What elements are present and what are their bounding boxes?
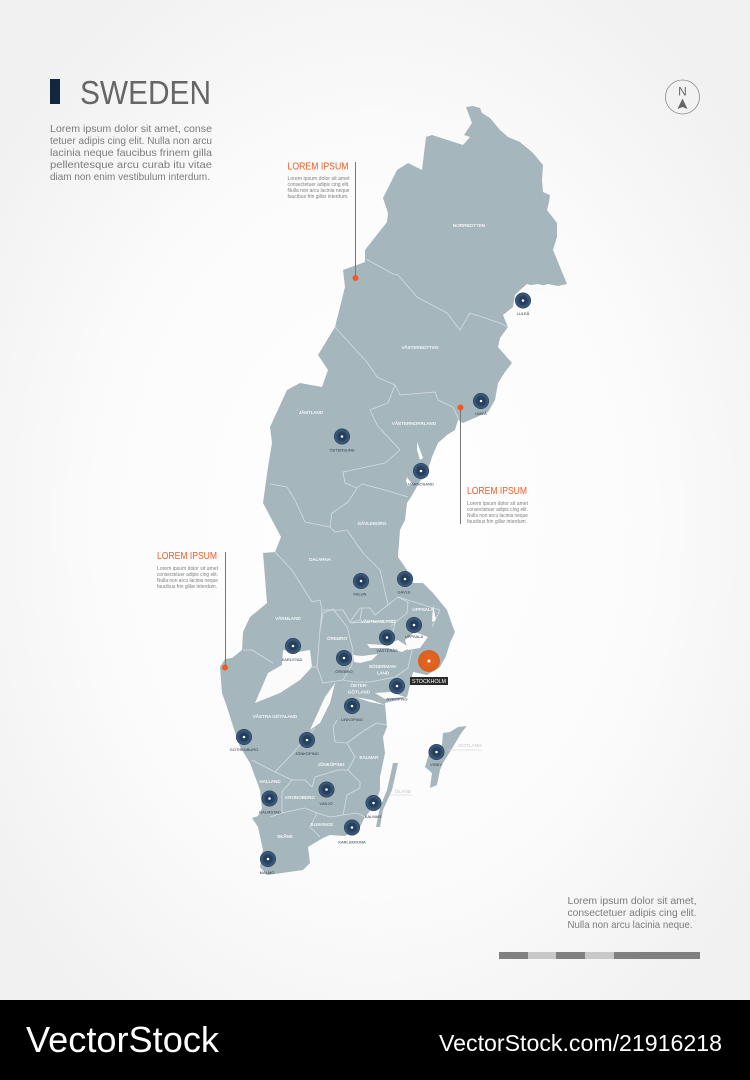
coastal specks	[525, 284, 566, 296]
mainland outline	[220, 106, 567, 875]
city pins	[230, 292, 531, 875]
intro paragraph	[50, 124, 212, 183]
capital pin: Stockholm	[410, 650, 448, 685]
region labels: VÄSTRA GÖTALAND	[253, 713, 298, 719]
island label: Oland: ÖLAND	[395, 788, 412, 795]
region labels: SÖDERMAN-	[369, 663, 398, 669]
region labels: VÄSTERNORRLAND	[392, 420, 437, 426]
city pins: VÄXJÖ	[319, 801, 333, 806]
region labels: ÖREBRO	[327, 635, 347, 641]
icon: north compass: N	[678, 84, 687, 98]
island label: Gotland	[449, 743, 482, 750]
region labels	[253, 223, 485, 839]
segmented bar	[499, 952, 700, 959]
callout: east: Nulla non arcu lacinia neque	[467, 513, 528, 519]
callout: west: LOREM IPSUM	[157, 551, 217, 562]
footer band: VectorStock.com/21916218	[439, 1030, 722, 1056]
callout: east: consectetuer adipis cing elit.	[467, 507, 528, 513]
region labels: HALLAND	[259, 779, 281, 784]
region labels: JÖNKÖPING	[317, 761, 345, 767]
callout: west: Lorem ipsum dolor sit amet	[157, 566, 219, 572]
callout: north: Lorem ipsum dolor sit amet	[288, 176, 350, 182]
callout: north: LOREM IPSUM	[288, 162, 348, 172]
city pins: NYKÖPING	[386, 696, 408, 702]
city pins: HALMSTAD	[259, 810, 281, 814]
city pins: LULEÅ	[517, 311, 530, 316]
region labels: SKÅNE	[277, 833, 293, 839]
region labels: LAND	[377, 670, 390, 676]
gotland	[425, 726, 467, 788]
city pins: FALUN	[354, 592, 367, 596]
region labels: JÄMTLAND	[299, 409, 324, 415]
callout: west: Nulla non arcu lacinia neque	[157, 578, 218, 584]
region labels: GÖTLAND	[348, 688, 371, 694]
intro paragraph: tetuer adipis cing elit. Nulla non arcu	[50, 136, 212, 147]
callout: west	[157, 551, 228, 670]
region labels: VÄRMLAND	[275, 615, 301, 621]
bottom paragraph	[568, 896, 696, 931]
city pins: LINKÖPING	[341, 717, 363, 722]
callout: north	[288, 162, 358, 281]
city pins: MALMÖ	[260, 870, 274, 875]
region labels: UPPSALA	[412, 607, 435, 612]
region borders	[366, 259, 508, 330]
region labels: VÄSTMANLAND	[361, 618, 396, 624]
city pins: ÖSTERSUND	[329, 448, 355, 452]
city pins: VISBY	[430, 762, 442, 767]
intro paragraph: diam non enim vestibulum interdum.	[50, 172, 210, 183]
intro paragraph: Lorem ipsum dolor sit amet, conse	[50, 124, 212, 135]
capital pin: Stockholm: STOCKHOLM	[412, 679, 447, 685]
oland	[376, 763, 398, 827]
city pins: UPPSALA	[405, 634, 424, 639]
callout: north: consectetuer adipis cing elit.	[288, 182, 350, 188]
region labels: GÄVLEBORG	[358, 520, 387, 526]
city pins: KARLSTAD	[282, 657, 303, 662]
footer band: VectorStock	[26, 1019, 220, 1060]
footer band	[0, 1000, 750, 1080]
map of Sweden	[220, 106, 567, 875]
region labels: KALMAR	[360, 755, 379, 760]
callout: east: Lorem ipsum dolor sit amet	[467, 501, 529, 507]
callout: east: LOREM IPSUM	[467, 486, 527, 497]
bottom paragraph: Lorem ipsum dolor sit amet,	[568, 896, 696, 907]
region labels: ÖSTER-	[350, 682, 368, 688]
city pins: GÄVLE	[397, 590, 411, 594]
city pins: GOTHENBURG	[230, 747, 258, 752]
bottom paragraph: Nulla non arcu lacinia neque.	[568, 920, 692, 931]
callout: east: faucibus frin gillar interdum.	[467, 519, 527, 525]
lakes	[255, 650, 312, 703]
city pins: JÖNKÖPING	[295, 751, 319, 756]
city pins: UMEÅ	[475, 411, 487, 416]
city pins: HÄRNÖSAND	[408, 482, 434, 486]
region labels: KRONOBERG	[285, 795, 315, 800]
city pins: KALMAR	[365, 814, 381, 819]
island label: Oland	[390, 788, 412, 795]
callout: west: faucibus frin gillar interdum.	[157, 584, 217, 590]
region labels: BLEKINGE	[311, 822, 333, 827]
city pins: VÄSTERÅS	[376, 648, 398, 653]
bottom paragraph: consectetuer adipis cing elit.	[568, 908, 696, 919]
region labels: VÄSTERBOTTEN	[401, 344, 439, 350]
title: SWEDEN: SWEDEN	[80, 75, 211, 112]
region labels: NORRBOTTEN	[453, 223, 485, 228]
intro paragraph: lacinia neque faucibus frinem gilla	[50, 148, 212, 159]
callout: west: consectetuer adipis cing elit.	[157, 572, 218, 578]
intro paragraph: pellentesque arcu curab itu vitae	[50, 160, 212, 171]
callout: east	[458, 404, 529, 525]
island label: Gotland: GOTLAND	[458, 743, 482, 749]
callout: north: Nulla non arcu lacinia neque	[288, 188, 350, 194]
city pins: ÖREBRO	[335, 669, 353, 674]
icon: north compass	[666, 80, 700, 114]
callout: north: faucibus frin gillar interdum.	[288, 194, 348, 200]
city pins: KARLSKRONA	[338, 840, 366, 844]
region labels: DALARNA	[309, 557, 332, 562]
